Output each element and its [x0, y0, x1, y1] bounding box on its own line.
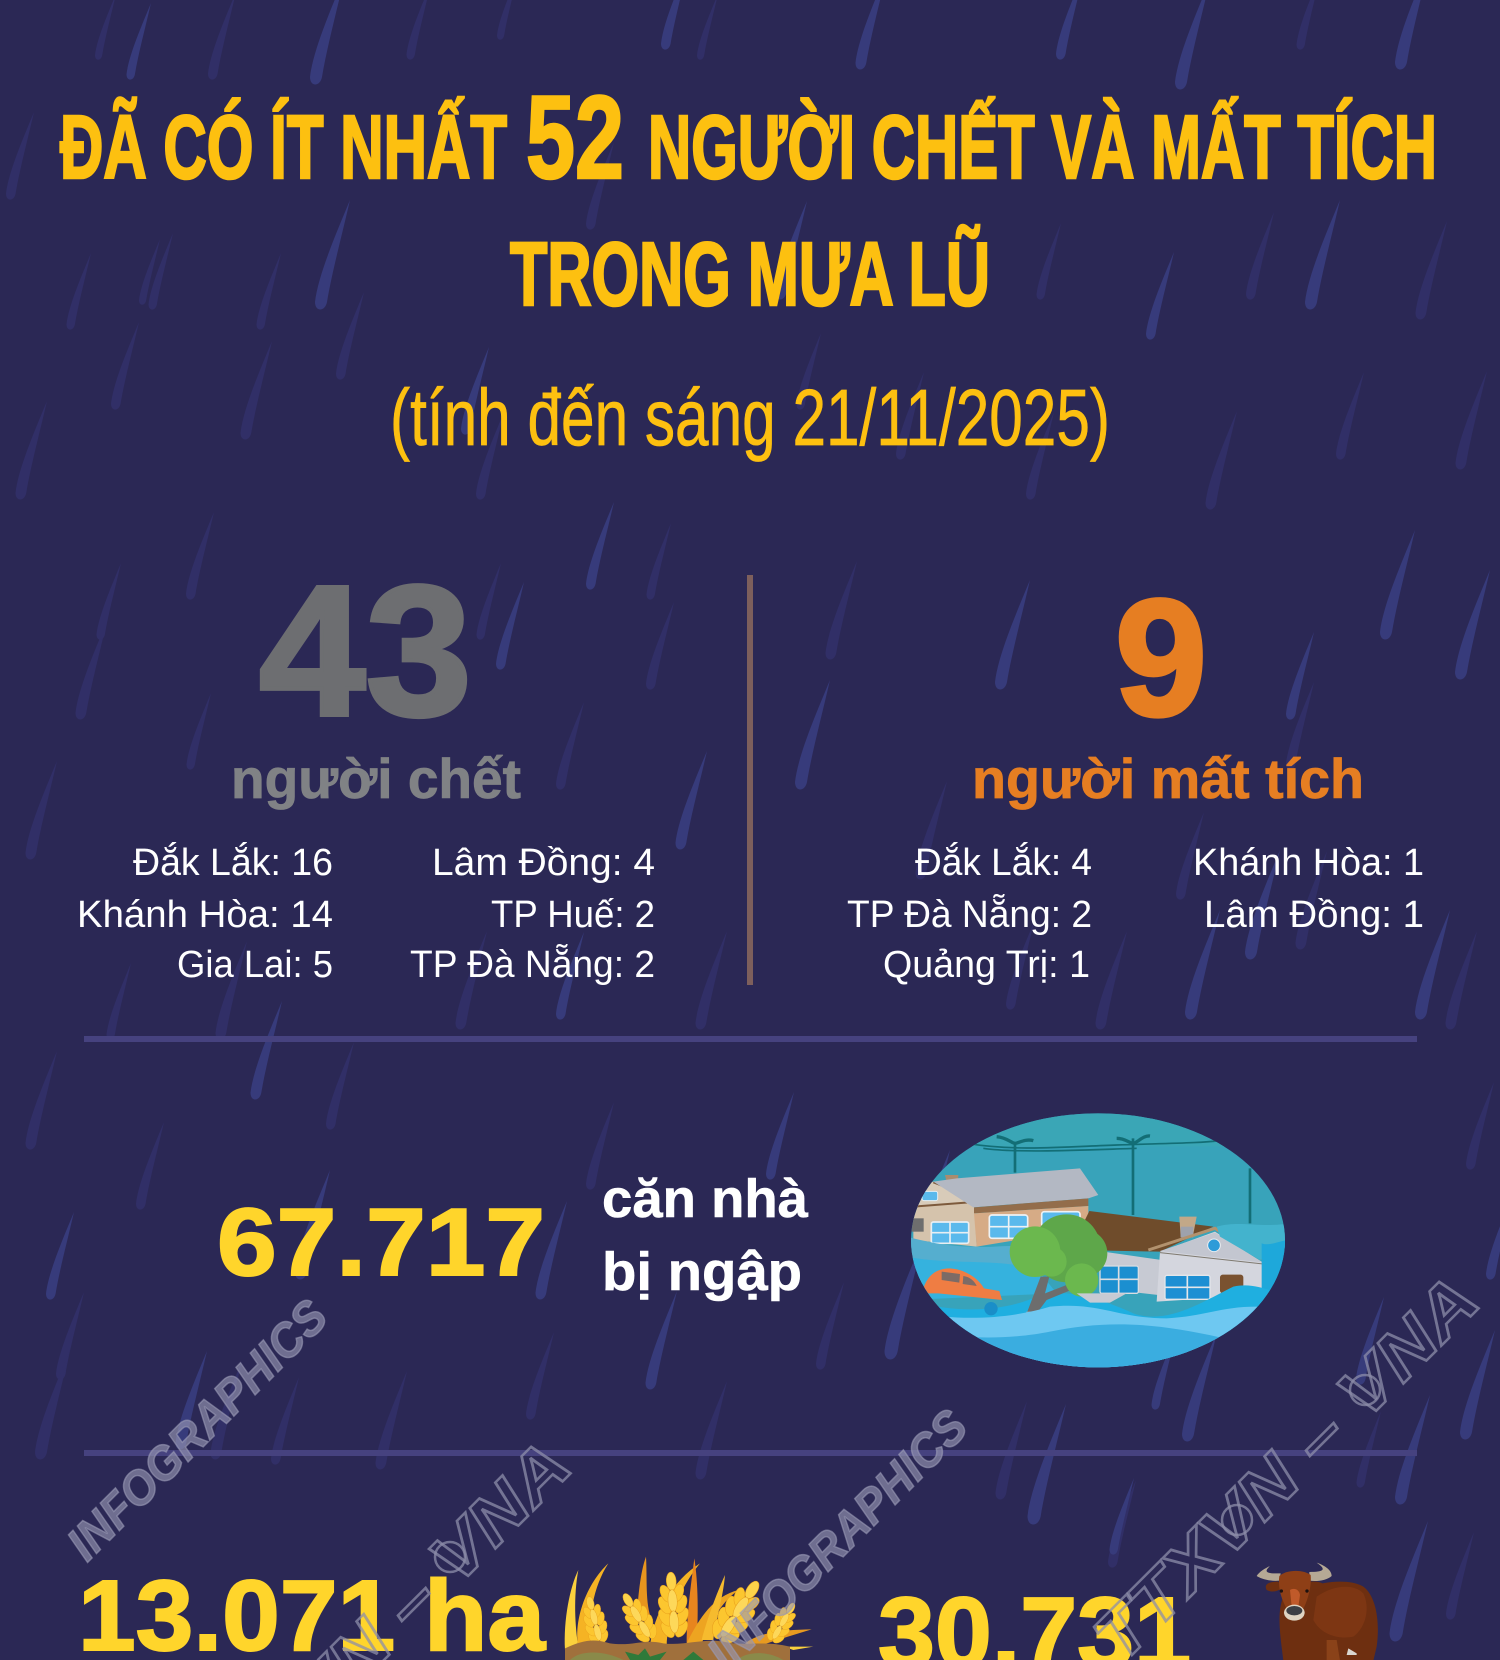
- car: [923, 1268, 1002, 1300]
- panel: deaths: [77, 548, 655, 986]
- stat: flooded crops: [78, 1557, 813, 1660]
- title: ĐÃ CÓ ÍT NHẤT: [60, 96, 507, 198]
- missing label: người mất tích: [972, 747, 1364, 810]
- missing by province: Quảng Trị: 1: [883, 944, 1090, 986]
- large grey-roof house: [945, 1175, 958, 1180]
- number of missing: 9: [1115, 566, 1207, 751]
- deaths by province: Gia Lai: 5: [177, 944, 333, 986]
- deaths by province: Khánh Hòa: 14: [77, 894, 333, 936]
- title: TRONG MƯA LŨ: [510, 224, 990, 325]
- flooded houses label: căn nhà: [602, 1169, 809, 1229]
- deaths by province: Đắk Lắk: 16: [133, 841, 333, 884]
- missing by province: Lâm Đồng: 1: [1204, 894, 1424, 936]
- watermark: agency marks: INFOGRAPHICS: [57, 1290, 338, 1571]
- icon: bull: [1257, 1563, 1378, 1660]
- utility poles: [967, 1136, 1250, 1223]
- tree: [1010, 1214, 1108, 1312]
- flooded houses label: [602, 1169, 809, 1302]
- deaths by province: TP Huế: 2: [491, 894, 655, 936]
- missing by province: Khánh Hòa: 1: [1193, 842, 1424, 884]
- illustration: flooded neighbourhood: [907, 1110, 1290, 1377]
- left house: [913, 1200, 977, 1247]
- number of deaths: 43: [259, 548, 472, 755]
- brown-roof house: [1083, 1211, 1213, 1252]
- flooded houses label: bị ngập: [602, 1242, 802, 1302]
- deaths by province: TP Đà Nẵng: 2: [410, 942, 655, 986]
- watermark: agency marks: [57, 1261, 1493, 1660]
- missing by province: Đắk Lắk: 4: [915, 841, 1092, 884]
- title: [60, 72, 1437, 325]
- title: 52: [526, 72, 624, 204]
- white house: [1157, 1232, 1263, 1302]
- missing by province: [847, 841, 1424, 986]
- icon: wheat: [565, 1557, 813, 1660]
- flooded houses number: 67.717: [217, 1189, 545, 1296]
- deaths by province: Lâm Đồng: 4: [432, 842, 655, 884]
- subtitle: date: (tính đến sáng 21/11/2025): [390, 373, 1110, 462]
- stat: livestock: [878, 1563, 1378, 1660]
- deaths label: người chết: [231, 747, 521, 810]
- missing by province: TP Đà Nẵng: 2: [847, 892, 1092, 936]
- flood water front: [938, 1285, 1270, 1368]
- stat: flooded houses: [217, 1169, 809, 1302]
- panel: missing: [847, 566, 1424, 986]
- deaths by province: [77, 841, 655, 986]
- flood water back: [911, 1238, 1013, 1283]
